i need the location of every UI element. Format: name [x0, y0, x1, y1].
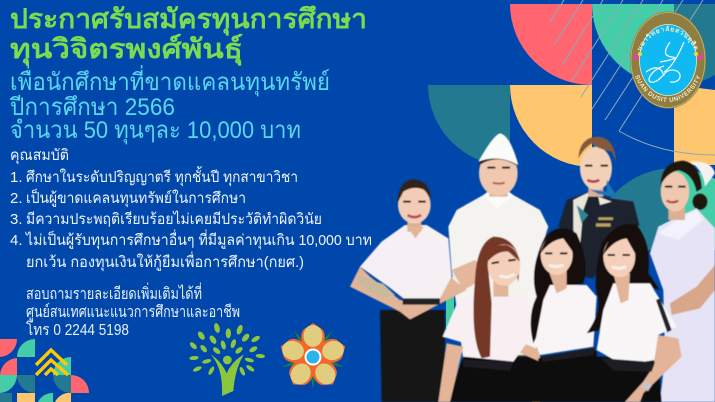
icon: university seal: SUAN DUSIT UNIVERSITY [636, 74, 700, 102]
qualifications list: ไม่เป็นผู้รับทุนการศึกษาอื่นๆ ที่มีมูลค่าทุนเกิน 10,000 บาท [25, 229, 372, 250]
icon: university seal: มหาวิทยาลัยสวนดุสิต [638, 26, 698, 51]
qualifications list: 1. [10, 169, 23, 186]
qualifications list: 3. [10, 211, 23, 228]
figure: front students backing [447, 357, 662, 402]
title: ประกาศรับสมัครทุนการศึกษา [10, 4, 367, 36]
qualifications list: 4. [10, 232, 23, 249]
icon: yellow chevrons [36, 350, 68, 375]
figure: chef [448, 133, 548, 402]
qualifications list: เป็นผู้ขาดแคลนทุนทรัพย์ในการศึกษา [26, 188, 246, 208]
figure: front student 1 [438, 237, 540, 402]
icon: flower emblem [277, 323, 349, 392]
contact information: ศูนย์สนเทศแนะแนวการศึกษาและอาชีพ [26, 302, 240, 322]
icon: university seal [630, 12, 706, 108]
students group photo [350, 133, 715, 402]
qualifications list [10, 147, 372, 272]
subtitle: เพื่อนักศึกษาที่ขาดแคลนทุนทรัพย์ [10, 65, 330, 97]
figure: front student 3 [587, 224, 682, 402]
figure: left student with tablet [350, 179, 467, 402]
emblem caption: มหาวิทยาลัยสวนดุสิต [297, 387, 330, 392]
subtitle [9, 65, 330, 145]
qualifications list: ศึกษาในระดับปริญญาตรี ทุกชั้นปี ทุกสาขาวิชา [26, 166, 298, 187]
contact information: โทร 0 2244 5198 [26, 320, 129, 339]
qualifications list: มีความประพฤติเรียบร้อยไม่เคยมีประวัติทำผิดวินัย [26, 210, 322, 228]
subtitle: ปีการศึกษา 2566 [9, 94, 175, 121]
contact information [26, 282, 240, 339]
figure: flight attendant [558, 137, 639, 278]
icon: green tree logo [189, 322, 265, 396]
figure: nurse [650, 161, 715, 402]
figure: front student 2 [531, 228, 598, 402]
decorative tile pattern [0, 339, 89, 402]
title: ทุนวิจิตรพงศ์พันธุ์ [10, 33, 243, 66]
geometric background shapes [428, 0, 715, 402]
contact information: สอบถามรายละเอียดเพิ่มเติมได้ที่ [26, 282, 202, 303]
qualifications list: ยกเว้น กองทุนเงินให้กู้ยืมเพื่อการศึกษา(กยศ.) [26, 251, 304, 272]
subtitle: จำนวน 50 ทุนๆละ 10,000 บาท [10, 117, 301, 145]
title [10, 4, 367, 66]
qualifications list: คุณสมบัติ [10, 147, 69, 165]
qualifications list: 2. [10, 190, 23, 207]
